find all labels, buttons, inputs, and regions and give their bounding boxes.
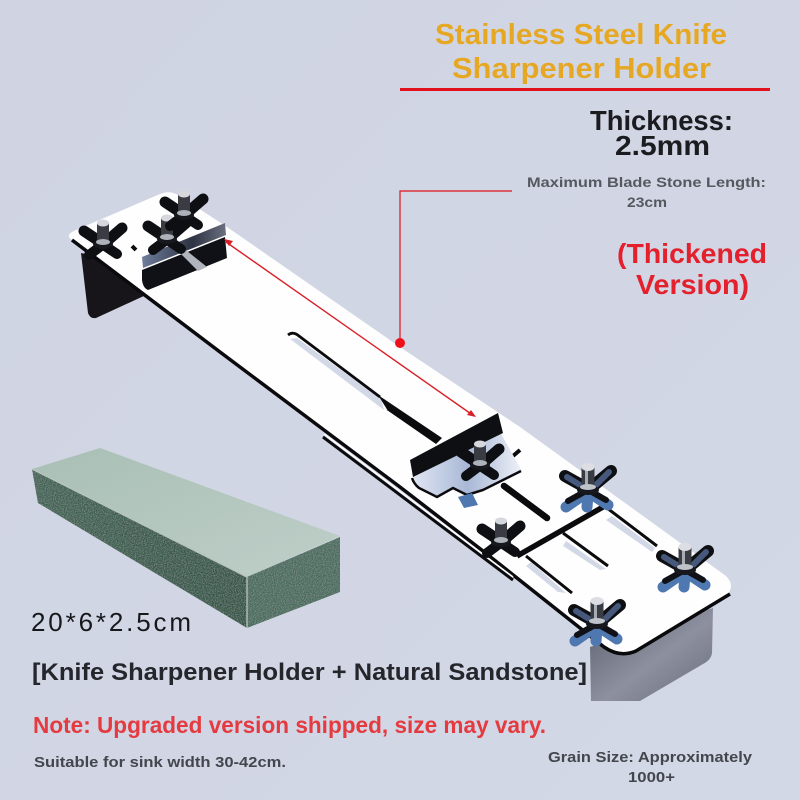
icon: right support leg bbox=[590, 608, 713, 701]
thickened version label: (Thickened bbox=[617, 238, 767, 269]
central slot edge bbox=[288, 333, 380, 397]
stone dimensions: 20*6*2.5cm bbox=[31, 607, 191, 637]
title bbox=[435, 19, 727, 85]
title underline bbox=[400, 88, 770, 91]
grain size: Grain Size: Approximately bbox=[548, 749, 753, 766]
central slot shading bbox=[290, 338, 384, 410]
icon: left support leg bbox=[81, 253, 146, 318]
thickened version label: Version) bbox=[636, 269, 749, 300]
dimension arrow: blade stone length bbox=[224, 239, 476, 417]
plate lower edge bbox=[72, 240, 730, 654]
sandstone block bbox=[32, 448, 340, 628]
grain size: 1000+ bbox=[628, 769, 675, 786]
thickened version label bbox=[617, 238, 767, 300]
thickness spec: 2.5mm bbox=[615, 130, 710, 161]
callout leader line bbox=[395, 191, 512, 348]
near clamp bbox=[142, 223, 227, 290]
note: Note: Upgraded version shipped, size may vary. bbox=[33, 712, 546, 738]
title: Sharpener Holder bbox=[452, 53, 711, 85]
bundle caption: [Knife Sharpener Holder + Natural Sandstone] bbox=[32, 659, 587, 686]
thickness spec: Thickness: bbox=[590, 105, 733, 136]
thickness spec bbox=[590, 105, 733, 161]
blade stone length label: Maximum Blade Stone Length: bbox=[527, 174, 766, 190]
blade stone length label: 23cm bbox=[627, 194, 667, 210]
end cross plate bbox=[517, 503, 657, 593]
title: Stainless Steel Knife bbox=[435, 19, 727, 51]
plate body bbox=[69, 192, 731, 653]
sink width note: Suitable for sink width 30-42cm. bbox=[34, 754, 286, 771]
slot beyond clamp bbox=[504, 486, 547, 518]
grain size bbox=[548, 749, 753, 786]
far clamp bbox=[410, 413, 522, 508]
lower rail with white stripe bbox=[323, 437, 513, 580]
icon: wing nuts bbox=[84, 190, 708, 641]
product: stainless steel holder bbox=[69, 190, 731, 654]
small slits bbox=[132, 246, 520, 456]
blade stone length label bbox=[527, 174, 766, 210]
